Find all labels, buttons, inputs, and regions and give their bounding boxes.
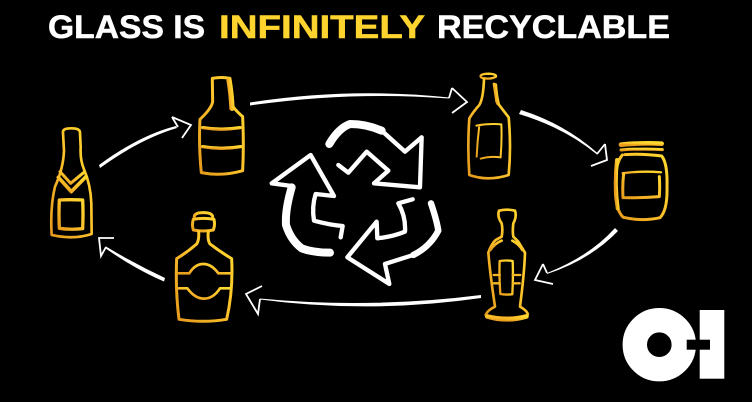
top arrow [329, 124, 422, 187]
logo: O-I [635, 310, 724, 379]
icon: whiskey bottle [176, 213, 232, 321]
icon: recycling symbol [272, 124, 438, 284]
title: RECYCLABLE [437, 9, 670, 45]
title: INFINITELY [219, 9, 425, 45]
arrow: bottle 3 to jar [519, 110, 607, 166]
arrow: whiskey bottle to bottle 1 [99, 238, 165, 282]
arrow: decanter to whiskey bottle [246, 286, 481, 314]
icon: long neck bottle [468, 74, 510, 178]
icon: square shouldered bottle [200, 77, 243, 174]
title [48, 9, 670, 45]
arrow: bottle 2 to bottle 3 [250, 88, 467, 113]
icon: jar [615, 143, 667, 220]
arrow: bottle 1 to bottle 2 [99, 117, 191, 168]
title: GLASS IS [48, 9, 205, 45]
icon: champagne bottle [51, 128, 92, 237]
bottom right arrow [347, 199, 438, 284]
arrow: jar to decanter [535, 228, 618, 284]
icon: decanter bottle [486, 210, 528, 320]
left arrow [272, 155, 343, 253]
